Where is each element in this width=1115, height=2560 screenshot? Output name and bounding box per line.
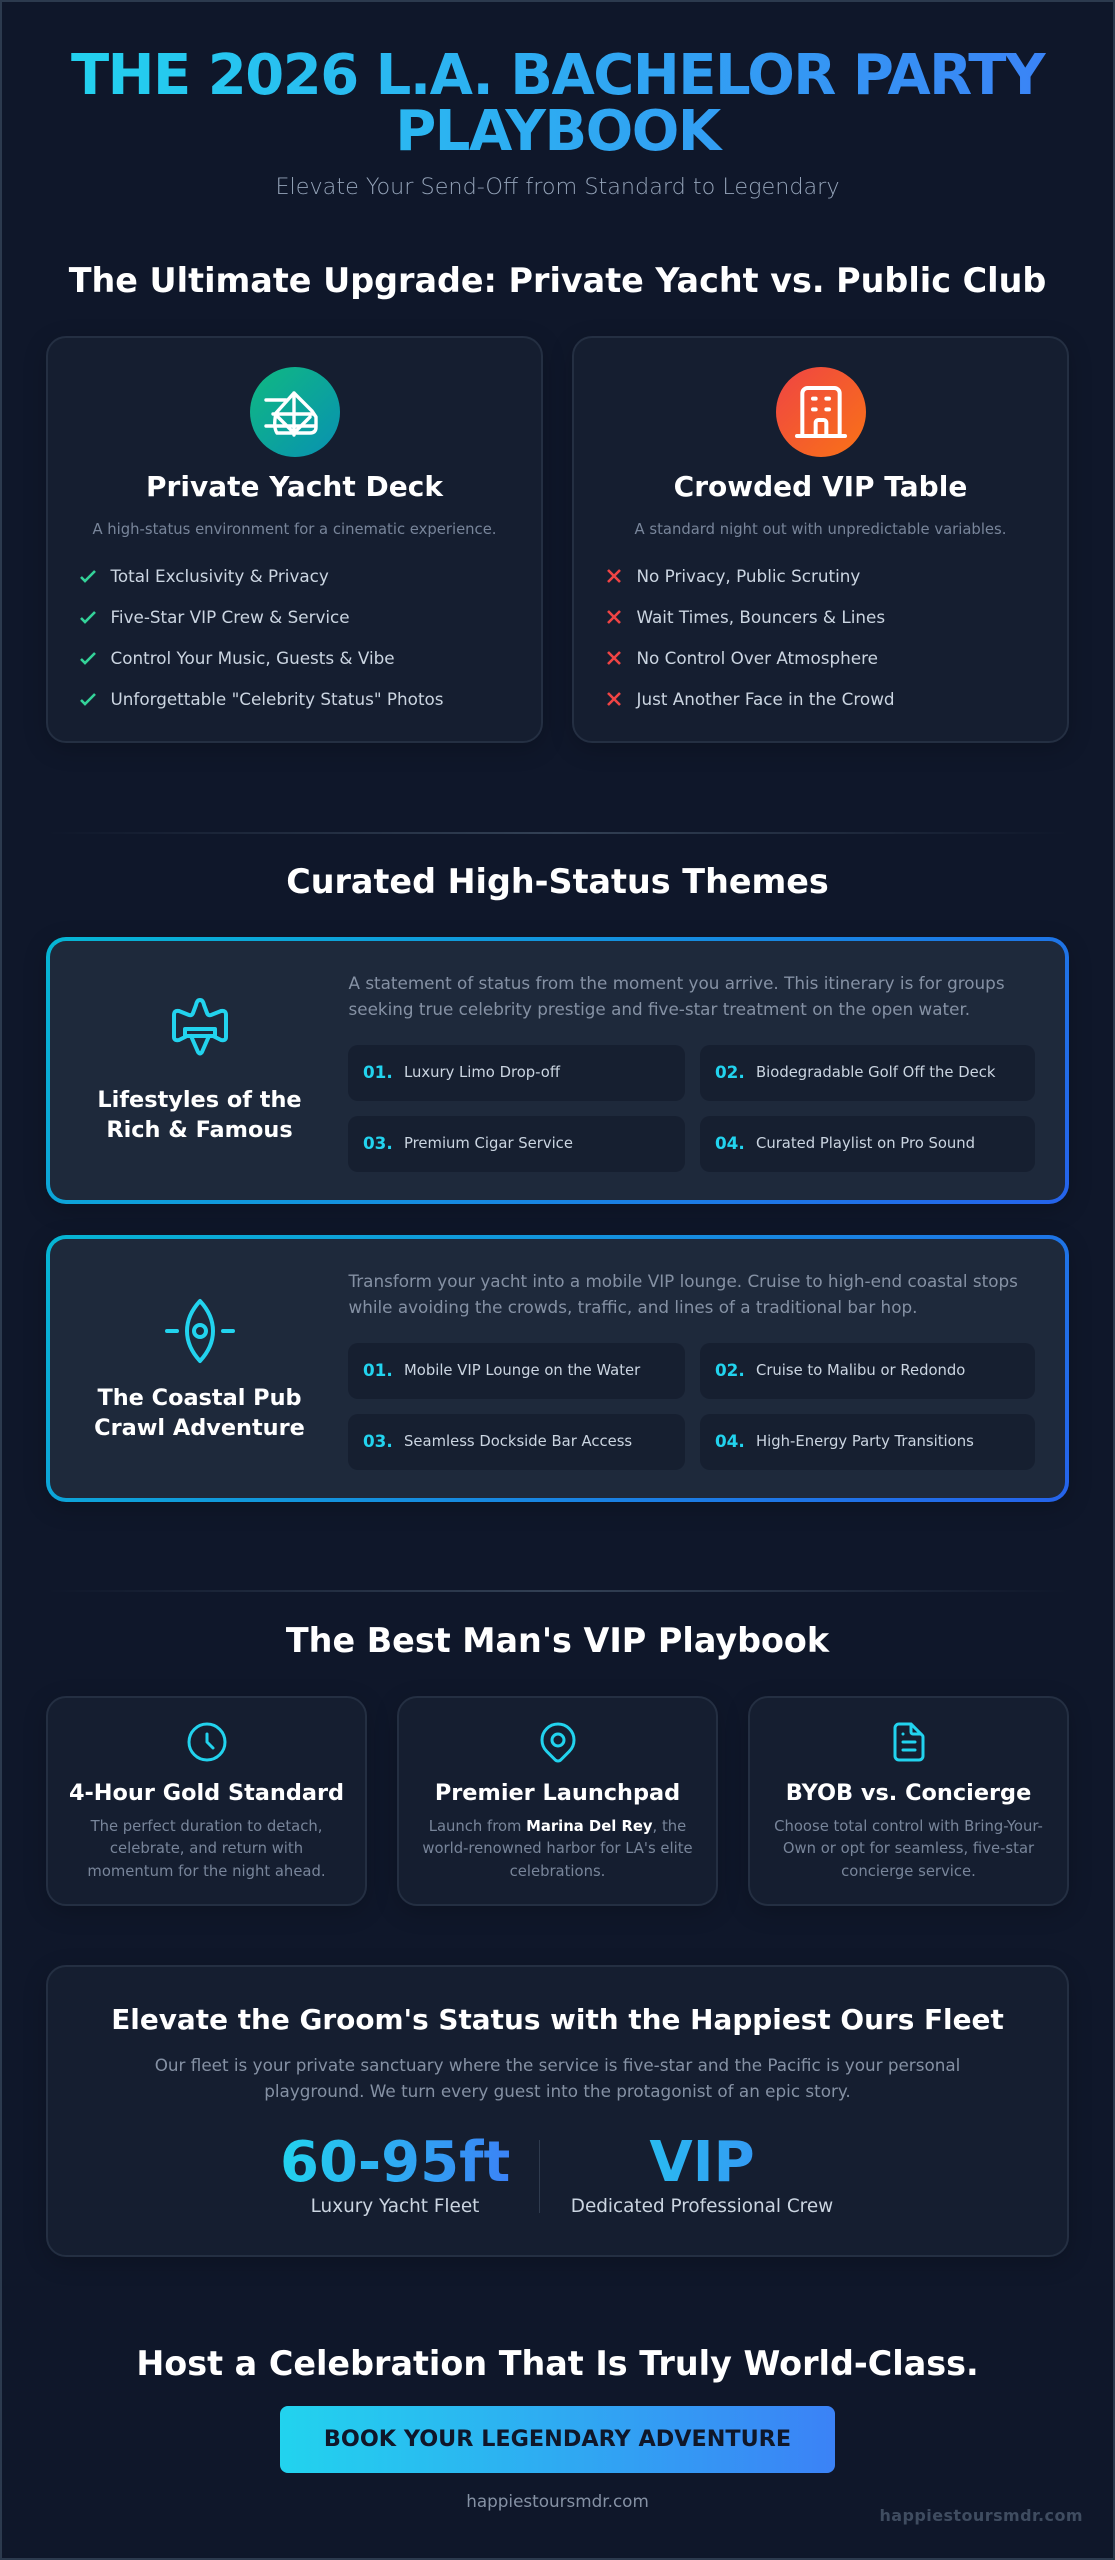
benefit 1: Total Exclusivity & Privacy [110, 566, 329, 586]
card description: celebrate, and return with [110, 1840, 303, 1857]
drawbacks list [607, 566, 895, 709]
icon: check [80, 652, 96, 665]
theme description: while avoiding the crowds, traffic, and lines of a traditional bar hop. [348, 1297, 917, 1317]
title: THE 2026 L.A. BACHELOR PARTY PLAYBOOK [71, 43, 1044, 164]
item 01: Luxury Limo Drop-off [404, 1064, 560, 1081]
item 01: 01. [363, 1062, 393, 1082]
card title: 4-Hour Gold Standard [69, 1780, 344, 1806]
theme title: Rich & Famous [106, 1117, 293, 1143]
icon: kayak [165, 1298, 235, 1364]
icon: lifestyles [172, 998, 228, 1056]
card description: A high-status environment for a cinematic experience. [92, 521, 497, 538]
benefit 2: Five-Star VIP Crew & Service [110, 607, 350, 627]
item 02: Biodegradable Golf Off the Deck [756, 1064, 995, 1081]
drawback 4: Just Another Face in the Crowd [636, 689, 895, 709]
stat label: Dedicated Professional Crew [571, 2196, 833, 2217]
icon: document [894, 1722, 924, 1762]
subtitle: Elevate Your Send-Off from Standard to Legendary [275, 174, 840, 200]
button: book adventure: BOOK YOUR LEGENDARY ADVENTURE [324, 2426, 791, 2452]
card description: The perfect duration to detach, [91, 1818, 322, 1835]
item 02 [700, 1045, 1035, 1101]
item 01: 01. [363, 1360, 393, 1380]
theme title [97, 1087, 302, 1143]
fleet description [155, 2055, 960, 2101]
card description [422, 1818, 693, 1880]
item 01 [348, 1343, 685, 1399]
panel: 4-hour gold standard [46, 1696, 367, 1906]
heading: playbook: The Best Man's VIP Playbook [286, 1621, 829, 1660]
panel: crowded vip table [572, 336, 1069, 743]
stat: yacht size [280, 2130, 510, 2217]
item 02 [700, 1343, 1035, 1399]
heading: themes: Curated High-Status Themes [286, 862, 829, 901]
item 03: 03. [363, 1133, 393, 1153]
fleet description: Our fleet is your private sanctuary where the service is five-star and the Pacific is your personal [155, 2055, 960, 2075]
icon: check [80, 693, 96, 706]
icon: clock [188, 1722, 226, 1762]
button: book adventure [280, 2406, 835, 2473]
item 01: Mobile VIP Lounge on the Water [404, 1362, 640, 1379]
theme description [348, 973, 1005, 1019]
item 03: Premium Cigar Service [404, 1135, 573, 1152]
stat: crew [571, 2130, 833, 2217]
closing headline: Host a Celebration That Is Truly World-Class. [136, 2344, 979, 2383]
card description: celebrations. [510, 1863, 605, 1880]
item 01 [348, 1045, 685, 1101]
card description: Choose total control with Bring-Your- [774, 1818, 1043, 1835]
item 04: 04. [715, 1133, 745, 1153]
card description: A standard night out with unpredictable variables. [635, 521, 1006, 538]
theme title [94, 1385, 305, 1441]
theme title: Lifestyles of the [97, 1087, 302, 1113]
website url: happiestoursmdr.com [466, 2491, 649, 2511]
benefit 4: Unforgettable "Celebrity Status" Photos [110, 689, 444, 709]
theme description: A statement of status from the moment you arrive. This itinerary is for groups [348, 973, 1005, 993]
icon: check [80, 611, 96, 624]
heading: ultimate upgrade: The Ultimate Upgrade: Private Yacht vs. Public Club [69, 261, 1046, 300]
card description [774, 1818, 1043, 1880]
panel: private yacht deck [46, 336, 543, 743]
stat label: Luxury Yacht Fleet [311, 2196, 479, 2217]
panel: coastal pub crawl theme [46, 1235, 1069, 1502]
theme title: The Coastal Pub [97, 1385, 302, 1411]
theme title: Crawl Adventure [94, 1415, 305, 1441]
icon: building [776, 367, 866, 457]
fleet heading: Elevate the Groom's Status with the Happiest Ours Fleet [111, 2003, 1004, 2036]
card description [87, 1818, 326, 1880]
card title: Premier Launchpad [435, 1780, 680, 1806]
panel: lifestyles theme [46, 937, 1069, 1204]
item 04: High-Energy Party Transitions [756, 1433, 974, 1450]
card title: Crowded VIP Table [674, 470, 967, 503]
panel: premier launchpad [397, 1696, 718, 1906]
icon: map pin [540, 1722, 576, 1762]
icon: cross [607, 610, 621, 624]
watermark: happiestoursmdr.com [879, 2506, 1083, 2525]
card description: concierge service. [841, 1863, 976, 1880]
theme description: seeking true celebrity prestige and five-star treatment on the open water. [348, 999, 970, 1019]
item 03 [348, 1414, 685, 1470]
item 03: 03. [363, 1431, 393, 1451]
benefits list [80, 566, 444, 709]
icon: cross [607, 569, 621, 583]
item 04 [700, 1116, 1035, 1172]
panel: byob vs concierge [748, 1696, 1069, 1906]
item 03: Seamless Dockside Bar Access [404, 1433, 632, 1450]
card description: Own or opt for seamless, five-star [783, 1840, 1034, 1857]
icon: cross [607, 651, 621, 665]
card title: Private Yacht Deck [146, 470, 443, 503]
stat value: 60-95ft [280, 2130, 510, 2195]
drawback 1: No Privacy, Public Scrutiny [636, 566, 860, 586]
drawback 3: No Control Over Atmosphere [636, 648, 878, 668]
item 02: Cruise to Malibu or Redondo [756, 1362, 965, 1379]
card description: momentum for the night ahead. [87, 1863, 326, 1880]
card description: world-renowned harbor for LA's elite [422, 1840, 693, 1857]
item 04: 04. [715, 1431, 745, 1451]
icon: cross [607, 692, 621, 706]
drawback 2: Wait Times, Bouncers & Lines [636, 607, 885, 627]
card title: BYOB vs. Concierge [786, 1780, 1031, 1806]
icon: yacht [250, 367, 340, 457]
icon: check [80, 570, 96, 583]
item 04 [700, 1414, 1035, 1470]
item 02: 02. [715, 1062, 745, 1082]
theme description [348, 1271, 1018, 1317]
theme description: Transform your yacht into a mobile VIP lounge. Cruise to high-end coastal stops [348, 1271, 1018, 1291]
panel: fleet [46, 1965, 1069, 2257]
stat value: VIP [649, 2130, 755, 2195]
fleet description: playground. We turn every guest into the protagonist of an epic story. [264, 2081, 851, 2101]
stat value [569, 2135, 835, 2191]
item 04: Curated Playlist on Pro Sound [756, 1135, 975, 1152]
card description: Launch from Marina Del Rey, the [429, 1818, 686, 1835]
item 02: 02. [715, 1360, 745, 1380]
benefit 3: Control Your Music, Guests & Vibe [110, 648, 395, 668]
item 03 [348, 1116, 685, 1172]
